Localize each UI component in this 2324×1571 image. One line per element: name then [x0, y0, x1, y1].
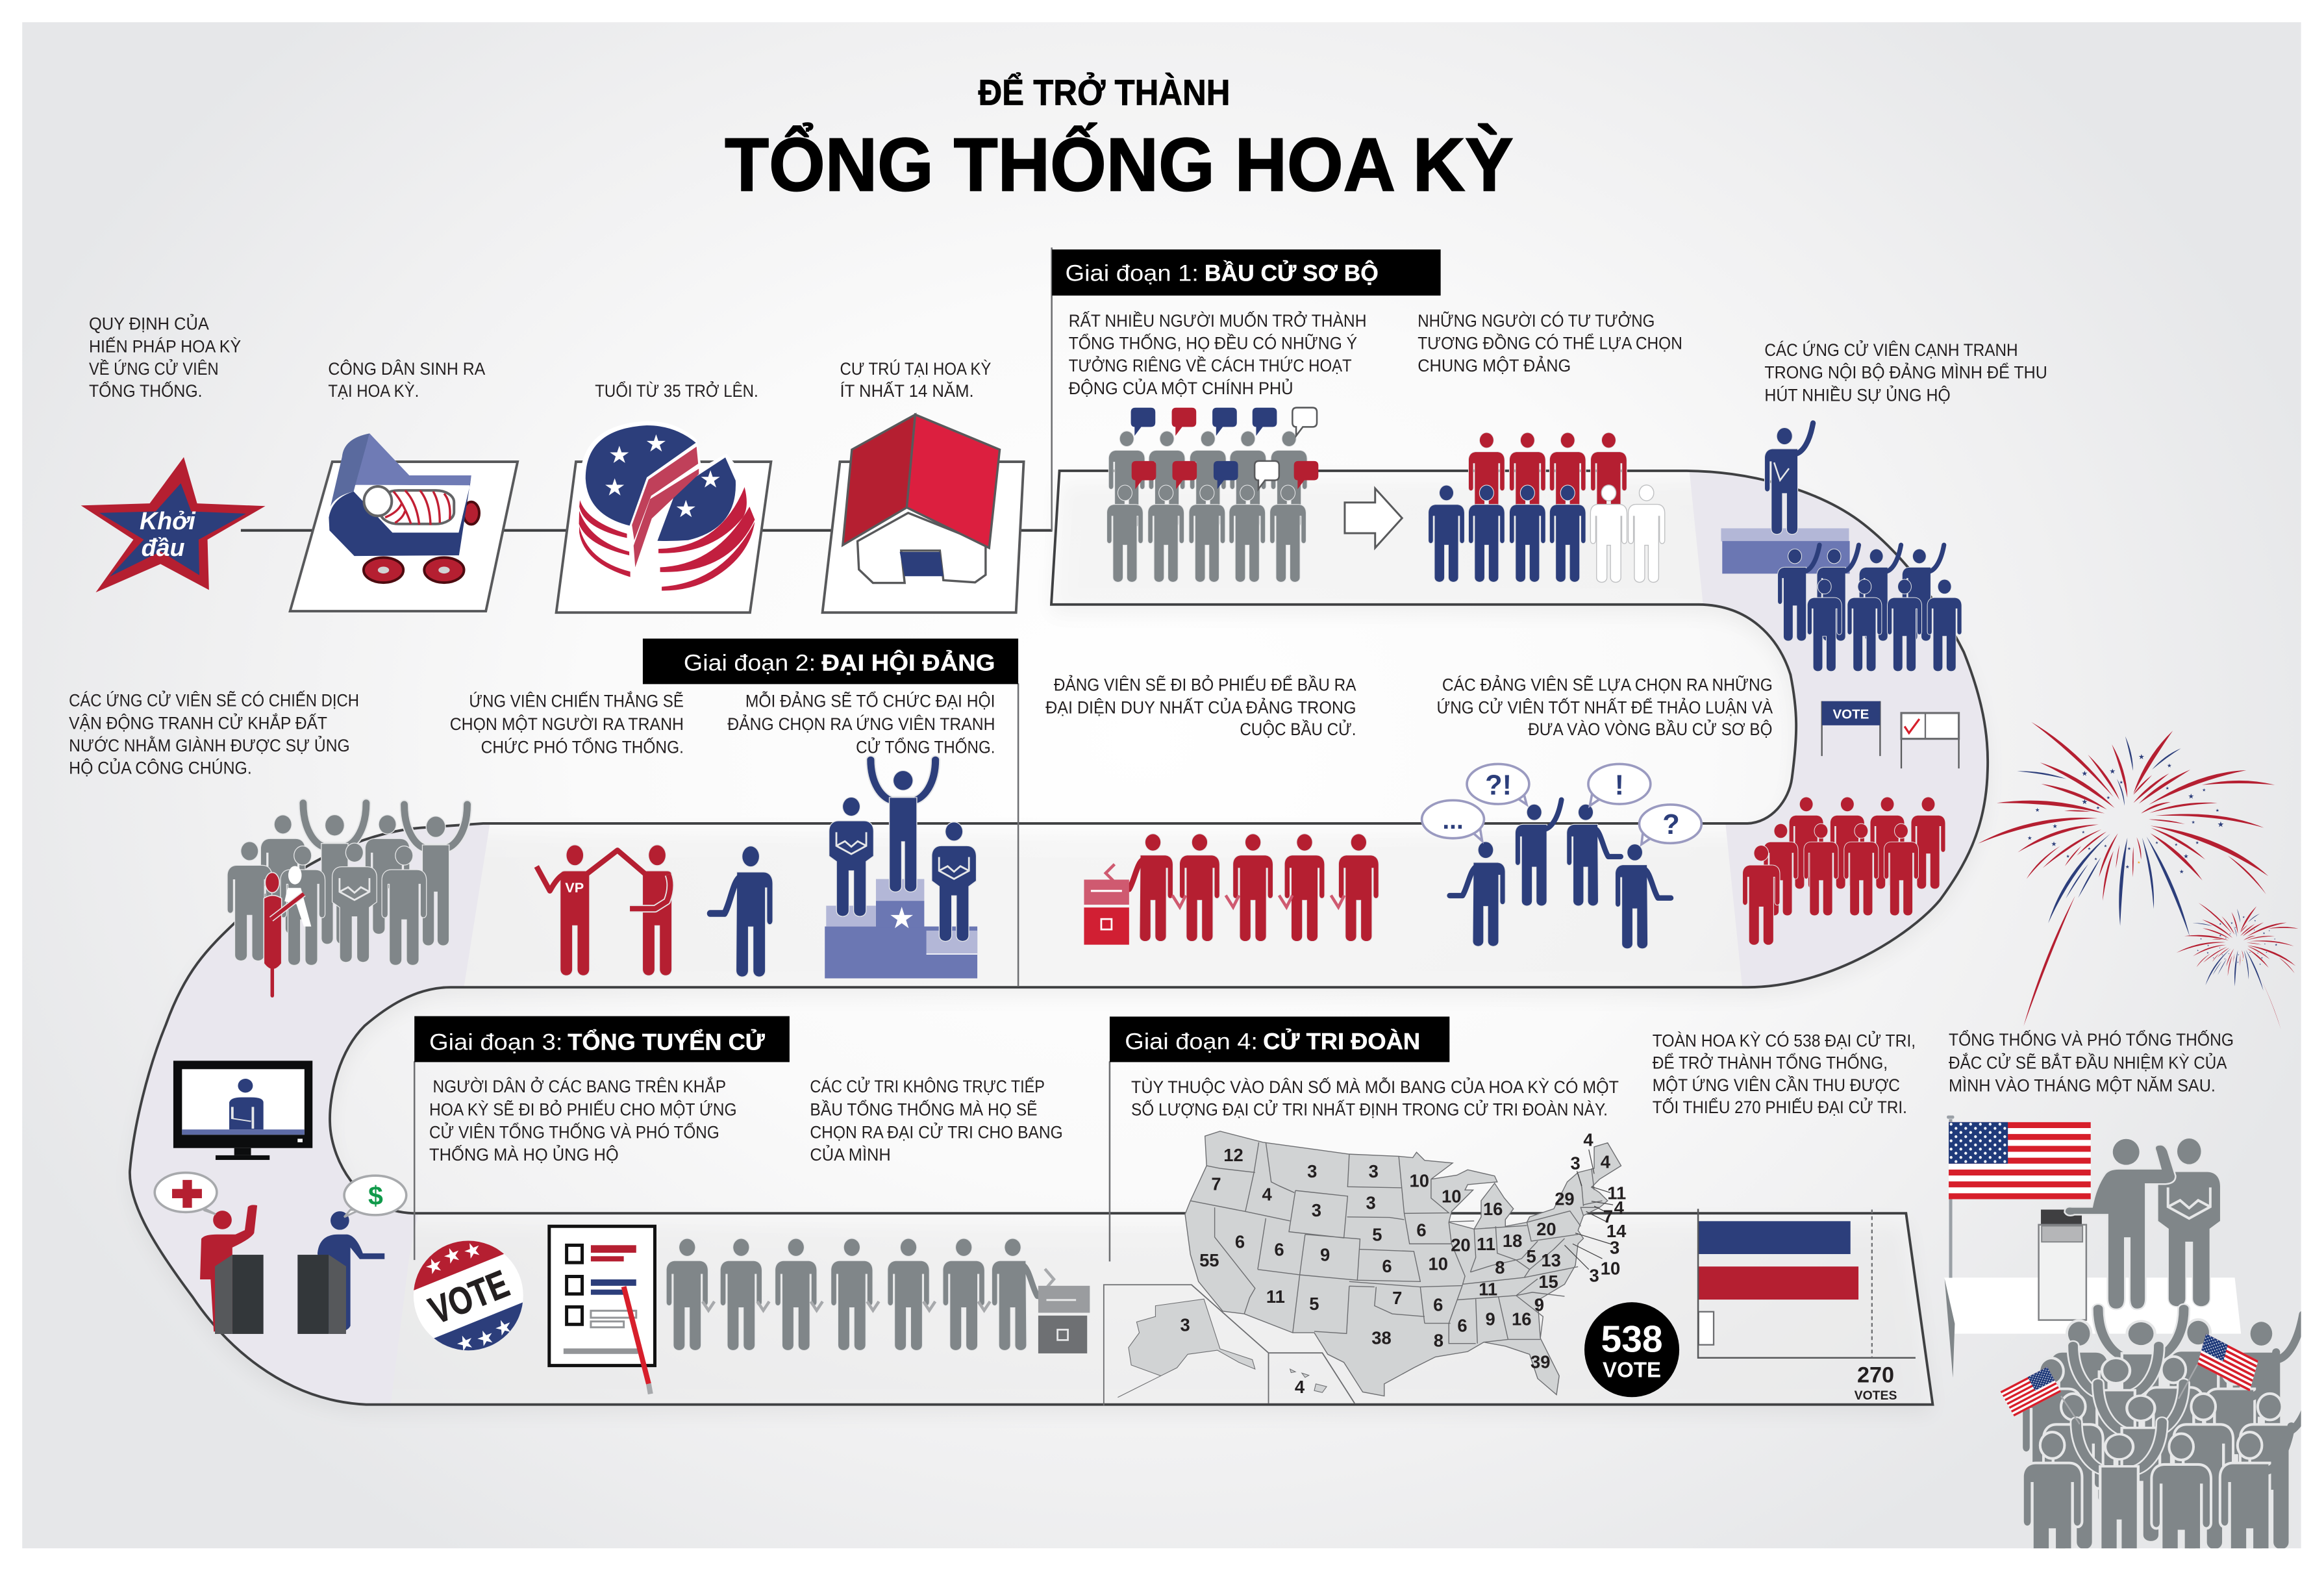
state vote numbers: 6: [1382, 1256, 1392, 1276]
bar chart: votes needed: 270: [1857, 1363, 1894, 1387]
state vote numbers: 15: [1538, 1272, 1558, 1292]
icon: US flag on pole: [1947, 1116, 2091, 1278]
state vote numbers: 3: [1366, 1193, 1376, 1213]
heading: stage 1: [1052, 249, 1441, 295]
icon: vote button: [414, 1240, 523, 1351]
group: campaign crowd: [228, 803, 468, 996]
snake track: [129, 247, 1990, 1409]
group: speaker on platform with supporters: [1721, 423, 1962, 671]
state vote numbers: 9: [1320, 1245, 1330, 1265]
state vote numbers: 10: [1429, 1254, 1448, 1274]
state vote numbers: 16: [1512, 1309, 1531, 1329]
text: stage 1 many candidates: [1069, 311, 1366, 398]
group: gray people with opinions: [1107, 408, 1318, 582]
heading: stage 1: BẦU CỬ SƠ BỘ: [1205, 260, 1379, 286]
text: constitution rule: HIẾN PHÁP HOA KỲ: [89, 337, 241, 357]
state vote numbers: 9: [1485, 1309, 1495, 1329]
state vote numbers: 3: [1180, 1314, 1190, 1335]
card: birthday cake: [556, 421, 771, 612]
heading: stage 4: CỬ TRI ĐOÀN: [1263, 1029, 1420, 1055]
map: electoral votes by state: [1104, 1130, 1627, 1405]
bar chart: votes needed: [1698, 1209, 1916, 1403]
icon: start star: đầu: [142, 534, 185, 561]
state vote numbers: 16: [1483, 1199, 1503, 1219]
text: stage 1 many candidates: TƯỞNG RIÊNG VỀ CÁCH THỨC HOẠT: [1069, 356, 1352, 375]
icon: start star: Khởi: [140, 507, 196, 534]
group: discussion with speech bubbles: ?!: [1485, 770, 1512, 801]
state vote numbers: 4: [1614, 1198, 1625, 1218]
heading: stage 2: Giai đoạn 2:: [684, 649, 816, 675]
text: inauguration: TỔNG THỐNG VÀ PHÓ TỔNG THỐNG: [1949, 1030, 2234, 1049]
text: 538 electors: ĐỂ TRỞ THÀNH TỔNG THỐNG,: [1653, 1053, 1888, 1073]
icon: large firework: [1977, 722, 2275, 1026]
icon: TV broadcast: [173, 1061, 312, 1160]
state vote numbers: 5: [1309, 1294, 1319, 1314]
text: inauguration: MÌNH VÀO THÁNG MỘT NĂM SAU.: [1949, 1076, 2216, 1096]
heading: stage 3: Giai đoạn 3:: [429, 1029, 562, 1055]
heading: stage 3: TỔNG TUYỂN CỬ: [568, 1029, 765, 1055]
state vote numbers: 18: [1503, 1231, 1522, 1251]
group: party members: [1429, 433, 1664, 582]
state vote numbers: 11: [1477, 1234, 1495, 1254]
text: choosing best candidates: ỨNG CỬ VIÊN TỐT NHẤT ĐỂ THẢO LUẬN VÀ: [1436, 698, 1773, 717]
icon: ballot sheet with pencil: [549, 1226, 655, 1394]
text: stage 1 competition: CÁC ỨNG CỬ VIÊN CẠNH TRANH: [1764, 340, 2018, 360]
text: born citizen: [328, 359, 486, 401]
badge: 538 vote: [1584, 1302, 1679, 1397]
text: constitution rule: TỔNG THỐNG.: [89, 381, 203, 401]
text: inauguration: ĐẮC CỬ SẼ BẮT ĐẦU NHIỆM KỲ CỦA: [1949, 1053, 2227, 1073]
badge: 538 vote: VOTE: [1603, 1358, 1661, 1382]
state vote numbers: [1180, 1130, 1627, 1397]
title: TỔNG THỐNG HOA KỲ: [725, 122, 1513, 207]
icon: dollar sign: $: [368, 1181, 383, 1211]
state vote numbers: 6: [1457, 1316, 1468, 1336]
text: vice president choice: CHỌN MỘT NGƯỜI RA TRANH: [450, 714, 684, 734]
text: electors: [810, 1077, 1063, 1164]
text: party members vote: ĐẢNG VIÊN SẼ ĐI BỎ PHIẾU ĐỂ BẦU RA: [1054, 675, 1356, 694]
text: stage 1 many candidates: ĐỘNG CỦA MỘT CHÍNH PHỦ: [1069, 379, 1293, 398]
group: presidential and vice-presidential candidates: VP: [565, 879, 584, 896]
text: choosing best candidates: ĐƯA VÀO VÒNG BẦU CỬ SƠ BỘ: [1528, 720, 1772, 739]
state vote numbers: 11: [1607, 1183, 1626, 1203]
state vote numbers: 39: [1531, 1352, 1550, 1372]
state vote numbers: 6: [1433, 1294, 1443, 1314]
text: 538 electors: TỐI THIỂU 270 PHIẾU ĐẠI CỬ TRI.: [1653, 1098, 1907, 1117]
text: stage 1 similar ideas: NHỮNG NGƯỜI CÓ TƯ TƯỞNG: [1418, 311, 1655, 331]
text: stage 1 competition: TRONG NỘI BỘ ĐẢNG MÌNH ĐỂ THU: [1764, 362, 2047, 382]
text: 538 electors: TOÀN HOA KỲ CÓ 538 ĐẠI CỬ TRI,: [1653, 1031, 1916, 1050]
text: stage 1 competition: HÚT NHIỀU SỰ ỦNG HỘ: [1764, 385, 1951, 405]
state vote numbers: 7: [1392, 1288, 1402, 1308]
text: citizens vote: [429, 1077, 737, 1164]
state vote numbers: 3: [1369, 1161, 1379, 1181]
state vote numbers: 3: [1570, 1153, 1581, 1174]
text: citizens vote: THỐNG MÀ HỌ ỦNG HỘ: [429, 1145, 619, 1164]
title: [725, 72, 1513, 207]
text: stage 1 similar ideas: [1418, 311, 1682, 375]
state vote numbers: 7: [1211, 1174, 1221, 1194]
card: house: [823, 414, 1024, 612]
text: residency: ÍT NHẤT 14 NĂM.: [840, 381, 974, 401]
text: electoral votes per state: [1131, 1077, 1619, 1119]
text: citizens vote: NGƯỜI DÂN Ở CÁC BANG TRÊN KHẮP: [432, 1077, 726, 1096]
text: campaign: NƯỚC NHẰM GIÀNH ĐƯỢC SỰ ỦNG: [69, 736, 350, 755]
text: 538 electors: [1653, 1031, 1916, 1117]
text: electors: BẦU TỔNG THỐNG MÀ HỌ SẼ: [810, 1100, 1038, 1120]
text: vice president choice: ỨNG VIÊN CHIẾN THẮNG SẼ: [469, 692, 684, 711]
text: stage 1 similar ideas: TƯƠNG ĐỒNG CÓ THỂ LỰA CHỌN: [1418, 334, 1682, 353]
state vote numbers: 10: [1442, 1187, 1462, 1207]
text: vice president choice: [450, 692, 684, 757]
text: residency: CƯ TRÚ TẠI HOA KỲ: [840, 359, 992, 379]
group: discussion with speech bubbles: [1422, 764, 1701, 948]
small waving flags: [2001, 1334, 2258, 1424]
text: party members vote: [1045, 675, 1356, 739]
state vote numbers: 11: [1266, 1287, 1285, 1307]
heading: stage 3: [414, 1016, 790, 1062]
state vote numbers: 6: [1274, 1239, 1284, 1259]
text: campaign: VẬN ĐỘNG TRANH CỬ KHẮP ĐẤT: [69, 713, 327, 733]
text: campaign: [69, 690, 359, 777]
card: baby stroller: [290, 433, 518, 611]
icon: vote signs: VOTE: [1832, 707, 1869, 722]
group: inauguration stage: [1944, 1116, 2312, 1571]
text: constitution rule: VỀ ỨNG CỬ VIÊN: [89, 359, 219, 379]
text: choosing best candidates: CÁC ĐẢNG VIÊN SẼ LỰA CHỌN RA NHỮNG: [1442, 675, 1773, 694]
text: age: TUỔI TỪ 35 TRỞ LÊN.: [595, 381, 758, 401]
group: discussion with speech bubbles: !: [1615, 770, 1624, 801]
state vote numbers: 10: [1601, 1258, 1620, 1278]
group: red voters and ballot box: [1084, 834, 1379, 945]
heading: stage 4: Giai đoạn 4:: [1125, 1029, 1258, 1055]
state vote numbers: 5: [1526, 1246, 1536, 1266]
state vote numbers: 7: [1603, 1206, 1613, 1226]
group: voters and ballot box: [667, 1238, 1090, 1353]
president and vice president: [2066, 1138, 2220, 1309]
heading: stage 2: ĐẠI HỘI ĐẢNG: [821, 649, 995, 675]
state vote numbers: 20: [1536, 1219, 1556, 1239]
text: citizens vote: CỬ VIÊN TỔNG THỐNG VÀ PHÓ TỔNG: [429, 1122, 719, 1142]
state vote numbers: 11: [1479, 1279, 1497, 1300]
text: electors: CỦA MÌNH: [810, 1145, 891, 1164]
text: born citizen: CÔNG DÂN SINH RA: [328, 359, 486, 379]
state vote numbers: 6: [1416, 1220, 1427, 1240]
group: red party members: [1743, 798, 1945, 945]
text: party convention: CỬ TỔNG THỐNG.: [856, 738, 995, 757]
text: stage 1 many candidates: RẤT NHIỀU NGƯỜI MUỐN TRỞ THÀNH: [1069, 311, 1366, 331]
text: campaign: CÁC ỨNG CỬ VIÊN SẼ CÓ CHIẾN DỊCH: [69, 690, 359, 710]
state vote numbers: 3: [1610, 1238, 1619, 1258]
text: born citizen: TẠI HOA KỲ.: [328, 381, 419, 401]
text: stage 1 similar ideas: CHUNG MỘT ĐẢNG: [1418, 356, 1571, 375]
text: electoral votes per state: SỐ LƯỢNG ĐẠI CỬ TRI NHẤT ĐỊNH TRONG CỬ TRI ĐOÀN NÀY.: [1131, 1100, 1608, 1119]
state vote numbers: 3: [1589, 1266, 1599, 1286]
state vote numbers: 29: [1555, 1189, 1575, 1209]
group: debate: [155, 1173, 406, 1334]
text: vice president choice: CHỨC PHÓ TỔNG THỐNG.: [481, 738, 684, 757]
heading: stage 4: [1110, 1016, 1449, 1062]
state vote numbers: 12: [1223, 1145, 1243, 1165]
bar chart: votes needed: VOTES: [1855, 1389, 1897, 1403]
text: stage 1 competition: [1764, 340, 2047, 405]
text: constitution rule: [89, 314, 241, 401]
state vote numbers: 6: [1235, 1232, 1245, 1252]
icon: small firework: [2177, 903, 2298, 1029]
text: party members vote: CUỘC BẦU CỬ.: [1240, 720, 1356, 739]
icon: start star: [81, 457, 266, 592]
podium: [2039, 1210, 2086, 1320]
text: 538 electors: MỘT ỨNG VIÊN CẦN THU ĐƯỢC: [1653, 1075, 1900, 1095]
text: campaign: HỘ CỦA CÔNG CHÚNG.: [69, 758, 252, 777]
title: ĐỂ TRỞ THÀNH: [978, 72, 1230, 113]
state vote numbers: 8: [1434, 1330, 1443, 1350]
state vote numbers: 20: [1451, 1235, 1471, 1255]
text: stage 1 many candidates: TỔNG THỐNG, HỌ ĐỀU CÓ NHỮNG Ý: [1069, 334, 1357, 353]
state vote numbers: 4: [1583, 1130, 1593, 1150]
text: party convention: ĐẢNG CHỌN RA ỨNG VIÊN TRANH: [727, 714, 995, 734]
text: party members vote: ĐẠI DIỆN DUY NHẤT CỦA ĐẢNG TRONG: [1045, 698, 1356, 717]
state vote numbers: 5: [1372, 1224, 1382, 1244]
state vote numbers: 38: [1371, 1327, 1392, 1348]
heading: stage 2: [643, 638, 1018, 684]
text: inauguration: [1949, 1030, 2234, 1096]
state vote numbers: 55: [1199, 1250, 1219, 1270]
text: residency: [840, 359, 992, 401]
text: choosing best candidates: [1436, 675, 1773, 739]
text: electoral votes per state: TÙY THUỘC VÀO DÂN SỐ MÀ MỖI BANG CỦA HOA KỲ CÓ MỘT: [1131, 1077, 1619, 1097]
state vote numbers: 14: [1606, 1221, 1627, 1241]
group: discussion with speech bubbles: ...: [1442, 807, 1464, 835]
icon: vote signs: [1822, 701, 1959, 768]
state vote numbers: 13: [1541, 1250, 1561, 1270]
platform: [1944, 1277, 2241, 1377]
state vote numbers: 8: [1495, 1257, 1505, 1277]
state vote numbers: 9: [1534, 1294, 1544, 1314]
group: presidential and vice-presidential candidates: [536, 845, 773, 977]
state vote numbers: 4: [1295, 1377, 1305, 1397]
text: party convention: MỖI ĐẢNG SẼ TỔ CHỨC ĐẠI HỘI: [745, 692, 995, 711]
text: constitution rule: QUY ĐỊNH CỦA: [89, 314, 209, 334]
icon: vote button: VOTE: [423, 1261, 515, 1333]
arrow: to parties: [1345, 488, 1402, 548]
badge: 538 vote: 538: [1601, 1319, 1663, 1361]
group: convention podium: [825, 760, 977, 978]
text: electors: CHỌN RA ĐẠI CỬ TRI CHO BANG: [810, 1122, 1063, 1142]
text: electors: CÁC CỬ TRI KHÔNG TRỰC TIẾP: [810, 1077, 1045, 1096]
text: party convention: [727, 692, 995, 757]
group: discussion with speech bubbles: ?: [1662, 809, 1680, 840]
state vote numbers: 10: [1410, 1171, 1429, 1191]
text: citizens vote: HOA KỲ SẼ ĐI BỎ PHIẾU CHO MỘT ỨNG: [429, 1100, 737, 1120]
state vote numbers: 3: [1307, 1161, 1317, 1181]
crowd: [2023, 1309, 2312, 1571]
state vote numbers: 3: [1312, 1200, 1321, 1220]
heading: stage 1: Giai đoạn 1:: [1065, 260, 1199, 286]
state vote numbers: 4: [1601, 1152, 1611, 1172]
state vote numbers: 4: [1262, 1184, 1272, 1204]
